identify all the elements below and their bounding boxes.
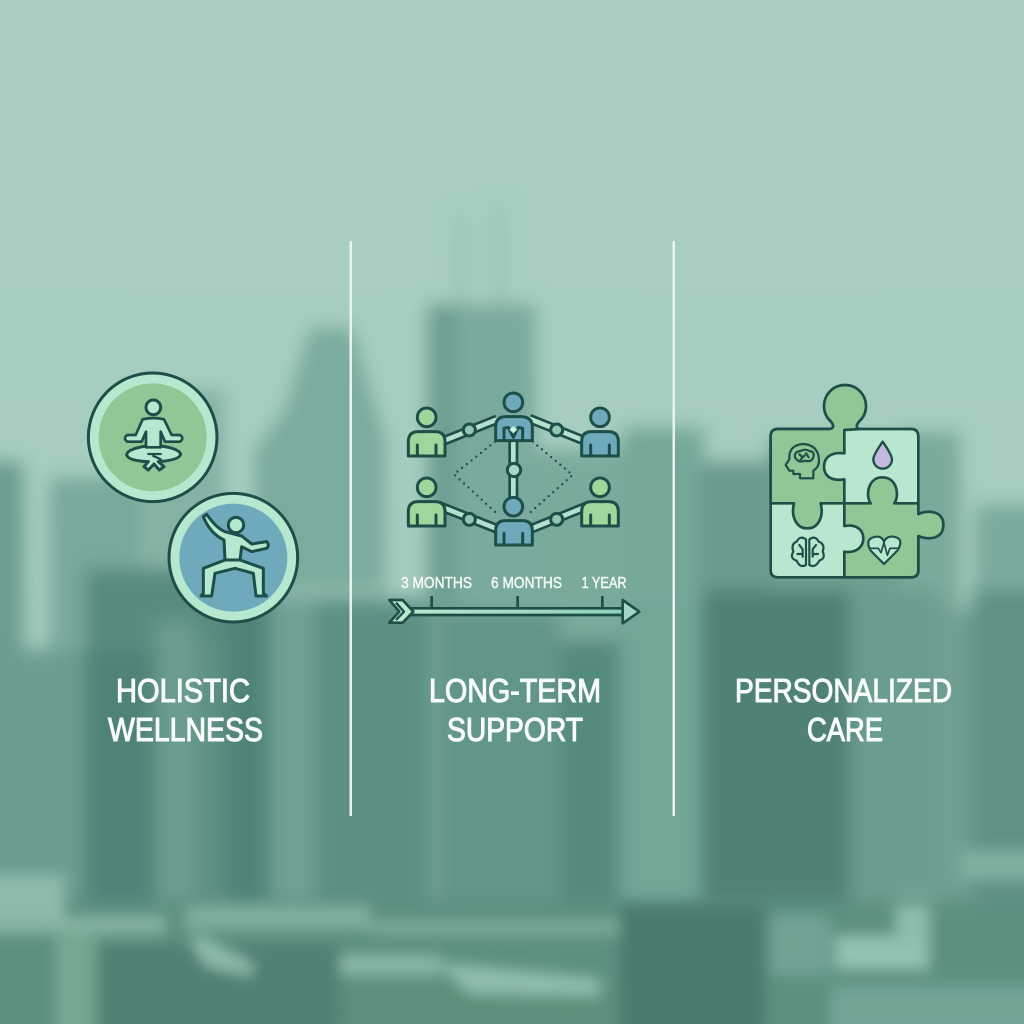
- person bottom left: [408, 478, 445, 526]
- puzzle piece bottom right: [844, 477, 943, 577]
- connector bands: [438, 419, 588, 531]
- heading: holistic wellness: HOLISTIC: [116, 672, 250, 709]
- icon: brain: [792, 538, 824, 566]
- timeline labels: 3 MONTHS: [401, 575, 472, 592]
- heading: long-term support: SUPPORT: [447, 711, 583, 748]
- icon: water drop: [873, 442, 892, 469]
- icon: tai chi badge: [169, 493, 298, 622]
- heading: holistic wellness: WELLNESS: [108, 711, 263, 748]
- heading: personalized care: CARE: [807, 711, 883, 748]
- icon: head with brain: [786, 444, 819, 478]
- icon group: holistic wellness: [88, 373, 298, 622]
- puzzle piece top left: [771, 385, 866, 528]
- timeline arrow: [389, 596, 639, 623]
- timeline: [389, 575, 639, 623]
- person top center: [496, 393, 532, 441]
- person bottom center: [496, 497, 532, 545]
- heading: long-term support: LONG-TERM: [429, 672, 601, 709]
- heading: long-term support: [429, 672, 601, 748]
- heading: holistic wellness: [108, 672, 263, 748]
- person bottom right: [582, 478, 618, 526]
- divider left: [350, 241, 352, 816]
- heading: personalized care: [735, 672, 952, 748]
- dotted diamond: [454, 442, 573, 513]
- icon: meditation badge: [88, 373, 217, 502]
- icon group: puzzle: [771, 385, 943, 577]
- timeline labels: 6 MONTHS: [491, 575, 562, 592]
- heading: personalized care: PERSONALIZED: [735, 672, 952, 709]
- puzzle base light pieces: [771, 429, 918, 577]
- timeline labels: [401, 575, 626, 592]
- timeline labels: 1 YEAR: [582, 575, 626, 592]
- icon: heart with pulse: [868, 537, 900, 564]
- icon group: long-term support network: [408, 393, 618, 545]
- connector nodes: [463, 424, 563, 525]
- person top left: [408, 408, 445, 456]
- person top right: [582, 408, 618, 456]
- divider right: [672, 241, 675, 816]
